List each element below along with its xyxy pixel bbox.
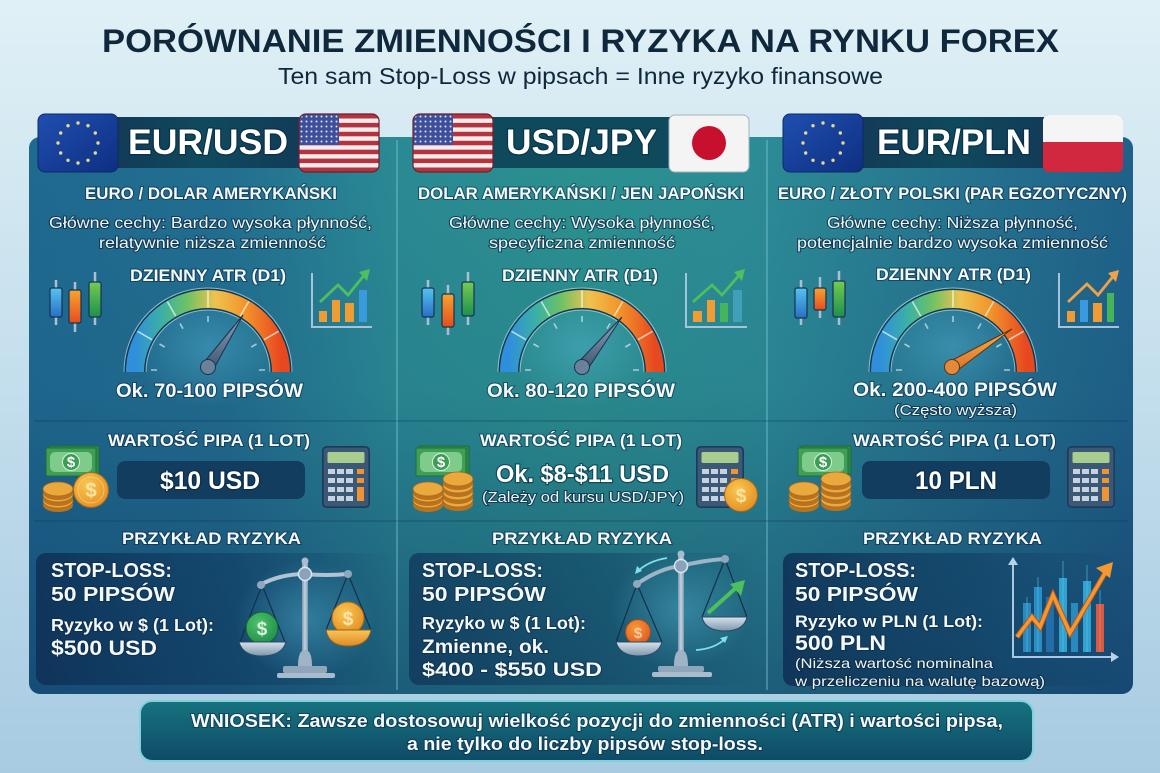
header: EUR/PLN: EUR/PLN (877, 123, 1031, 162)
icon: calculator with coin: $ (736, 486, 747, 507)
main features: relatywnie niższa zmienność (99, 235, 326, 252)
header: EUR/USD (38, 114, 379, 172)
heading: daily ATR: DZIENNY ATR (D1) (502, 267, 658, 285)
needle (574, 317, 622, 374)
panel: USD/JPY (409, 114, 759, 685)
conclusion box: a nie tylko do liczby pipsów stop-loss. (407, 733, 763, 754)
header: USD/JPY: USD/JPY (506, 123, 657, 162)
gauge: ATR (878, 287, 1028, 407)
icon: balanced scale: $ (257, 619, 268, 640)
main features: Główne cechy: Wysoka płynność, (449, 215, 715, 232)
icon: growth chart (1059, 270, 1119, 327)
icon: money and coins: $ (819, 454, 828, 471)
main features (49, 215, 372, 252)
pair name: EURO / ZŁOTY POLSKI (PAR EGZOTYCZNY) (778, 185, 1127, 203)
main features: Główne cechy: Niższa płynność, (827, 215, 1078, 232)
icon: balanced scale: $ (343, 609, 354, 630)
icon: candlesticks (50, 272, 101, 332)
pair name: DOLAR AMERYKAŃSKI / JEN JAPOŃSKI (418, 184, 744, 203)
pip value box: 10 PLN (915, 467, 997, 495)
heading: pip value: WARTOŚĆ PIPA (1 LOT) (853, 431, 1056, 450)
icon: calculator (1068, 447, 1114, 507)
heading: risk example: PRZYKŁAD RYZYKA (122, 530, 301, 548)
conclusion box (140, 701, 1033, 761)
panel: EUR/PLN (778, 114, 1128, 689)
risk example box (36, 553, 394, 685)
heading: pip value: WARTOŚĆ PIPA (1 LOT) (108, 431, 310, 450)
pip value box (117, 461, 305, 499)
pip value box (862, 461, 1050, 499)
heading: risk example: PRZYKŁAD RYZYKA (863, 530, 1042, 548)
ATR value: Ok. 80-120 PIPSÓW (487, 380, 675, 402)
risk example box: w przeliczeniu na walutę bazową) (794, 673, 1045, 689)
main features: Główne cechy: Bardzo wysoka płynność, (49, 215, 372, 232)
risk example box: 50 PIPSÓW (422, 582, 547, 606)
ATR value: Ok. 70-100 PIPSÓW (116, 380, 303, 402)
header: EUR/PLN (783, 114, 1123, 172)
icon: money and coins (43, 446, 108, 512)
ATR value: (Często wyższa) (894, 403, 1017, 419)
risk example box: STOP-LOSS: (795, 559, 916, 582)
risk example box: Zmienne, ok. (422, 636, 549, 658)
icon: money and coins (413, 446, 473, 512)
risk example box: $500 USD (51, 637, 157, 660)
pip value (482, 461, 684, 506)
main features: potencjalnie bardzo wysoka zmienność (797, 235, 1108, 252)
icon: growth chart (686, 269, 747, 327)
main features: specyficzna zmienność (489, 235, 675, 252)
pip value: Ok. $8-$11 USD (496, 461, 669, 488)
icon: money and coins: $ (67, 454, 76, 471)
risk example box: $400 - $550 USD (422, 659, 602, 681)
gauge: ATR (133, 287, 283, 407)
icon: candlesticks (795, 271, 845, 325)
icon: tilted scale: $ (634, 625, 643, 642)
gauge: ATR (507, 287, 657, 407)
icon: growth chart (312, 269, 372, 327)
icon: money and coins: $ (85, 480, 97, 502)
ATR value (853, 379, 1057, 419)
main features (797, 215, 1108, 252)
icon: volatile market chart (1008, 557, 1119, 662)
icon: calculator (323, 447, 369, 507)
icon: tilted scale (611, 550, 751, 677)
conclusion box: WNIOSEK: Zawsze dostosowuj wielkość pozycji do zmienności (ATR) i wartości pipsa, (191, 710, 1003, 731)
risk example box: (Niższa wartość nominalna (795, 655, 993, 671)
icon: money and coins (789, 446, 851, 512)
heading: risk example: PRZYKŁAD RYZYKA (492, 530, 672, 548)
heading: daily ATR: DZIENNY ATR (D1) (130, 267, 286, 285)
icon: balanced scale (235, 558, 375, 680)
header: EUR/USD: EUR/USD (128, 123, 288, 162)
pip value: (Zależy od kursu USD/JPY) (482, 490, 684, 506)
risk example box: Ryzyko w $ (1 Lot): (422, 613, 586, 633)
heading: daily ATR: DZIENNY ATR (D1) (876, 266, 1031, 284)
risk example box: 50 PIPSÓW (795, 582, 919, 606)
pair name: EURO / DOLAR AMERYKAŃSKI (85, 184, 337, 203)
icon: calculator with coin (697, 447, 758, 512)
risk example box: STOP-LOSS: (422, 559, 543, 582)
ATR value: Ok. 200-400 PIPSÓW (853, 379, 1057, 401)
needle (944, 329, 1012, 374)
header: USD/JPY (413, 114, 749, 172)
risk example box (409, 553, 759, 685)
heading: pip value: WARTOŚĆ PIPA (1 LOT) (480, 431, 682, 450)
risk example box (783, 553, 1128, 689)
main features (449, 215, 715, 252)
subtitle: Ten sam Stop-Loss w pipsach = Inne ryzyko finansowe (278, 63, 883, 89)
icon: candlesticks (422, 272, 474, 335)
risk example box: Ryzyko w PLN (1 Lot): (795, 612, 983, 631)
risk example box: 50 PIPSÓW (51, 582, 176, 606)
risk example box: STOP-LOSS: (51, 559, 172, 582)
needle (200, 315, 243, 374)
icon: money and coins: $ (437, 454, 446, 471)
risk example box: 500 PLN (795, 632, 886, 655)
pip value box: $10 USD (160, 467, 260, 495)
risk example box: Ryzyko w $ (1 Lot): (51, 615, 214, 635)
panel: EUR/USD (36, 114, 394, 685)
panel: comparison background (29, 137, 1133, 694)
title: PORÓWNANIE ZMIENNOŚCI I RYZYKA NA RYNKU FOREX (102, 23, 1060, 59)
